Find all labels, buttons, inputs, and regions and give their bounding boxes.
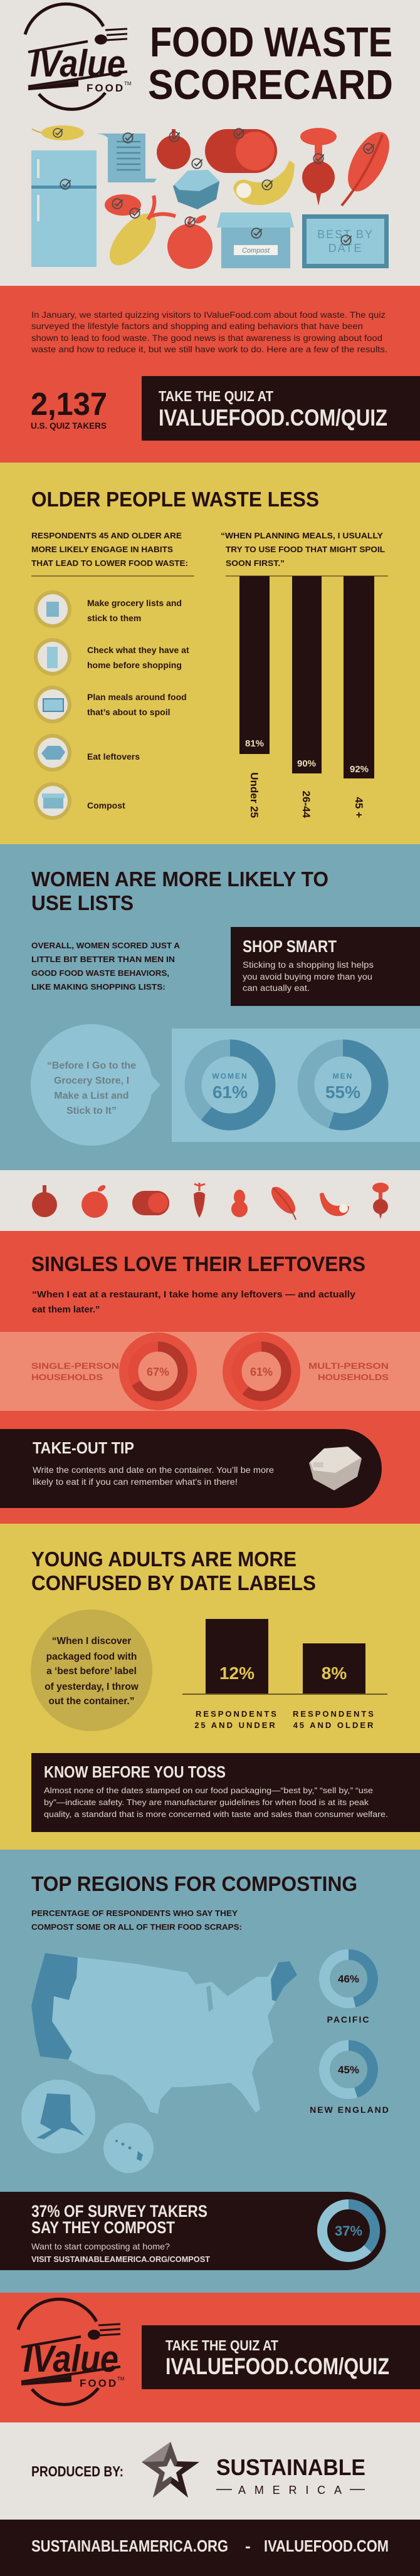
heading: OLDER PEOPLE WASTE LESS	[31, 488, 319, 511]
quote bubble: of yesterday, I throw	[45, 1682, 139, 1692]
heading	[31, 867, 328, 914]
label: multi-person households: HOUSEHOLDS	[318, 1372, 389, 1382]
donut chart: new england 45%: 45%	[338, 2064, 359, 2076]
bar chart: date label confusion	[182, 1619, 387, 1730]
panel: intro	[0, 286, 420, 463]
subheading	[31, 1908, 242, 1932]
callout: 37% say they compost: 37% OF SURVEY TAKERS	[31, 2202, 207, 2221]
callout: 37% say they compost: SAY THEY COMPOST	[31, 2218, 175, 2237]
bar chart: date label confusion: 45 AND OLDER	[293, 1720, 375, 1730]
intro paragraph	[31, 310, 387, 354]
logo text: sustainable america: AMERICA	[238, 2484, 342, 2496]
heading: SINGLES LOVE THEIR LEFTOVERS	[31, 1252, 365, 1275]
habit: plan meals: Plan meals around food	[87, 692, 187, 702]
habit: compost	[34, 782, 125, 820]
donut chart: 37%: 37%	[335, 2223, 362, 2239]
speech bubble: quote: Make a List and	[54, 1091, 129, 1101]
logo text: sustainable america	[216, 2454, 365, 2496]
icon: best by date	[302, 214, 389, 268]
callout: shop smart: Sticking to a shopping list helps	[243, 960, 374, 970]
callout: shop smart: SHOP SMART	[243, 937, 337, 956]
icon: takeout container	[309, 1447, 362, 1490]
quote bubble: “When I discover	[52, 1636, 131, 1647]
label: single-person households	[31, 1361, 119, 1382]
text block: habits intro: MORE LIKELY ENGAGE IN HABITS	[31, 545, 173, 554]
icon: best by date: BEST BY	[317, 228, 374, 241]
bar chart: use food that might spoil: 81%	[245, 738, 264, 749]
text block: women scored better	[31, 941, 181, 992]
donut chart: multi-person 61%	[223, 1333, 300, 1410]
icon: sausage	[132, 1191, 169, 1215]
donut chart: pacific 46%: PACIFIC	[327, 2014, 370, 2024]
text block: women scored better: LITTLE BIT BETTER THAN MEN IN	[31, 955, 175, 964]
icon: onion	[32, 1185, 57, 1217]
habit: plan meals: that’s about to spoil	[87, 707, 170, 717]
donut chart: men 55%	[306, 1048, 380, 1122]
icon: fridge	[31, 150, 97, 267]
bar chart: use food that might spoil	[239, 576, 374, 819]
icon: takeout box	[173, 159, 219, 209]
habit: grocery lists	[34, 590, 182, 628]
stat: quiz takers: 2,137	[31, 386, 107, 422]
donut chart: men 55%: MEN	[333, 1072, 353, 1081]
callout: take the quiz	[142, 376, 420, 441]
icon: squash	[231, 1190, 248, 1217]
quote bubble: packaged food with	[46, 1652, 137, 1662]
subheading: PERCENTAGE OF RESPONDENTS WHO SAY THEY	[31, 1908, 238, 1918]
logo: I Value Food	[18, 2299, 125, 2404]
habit: check home: Check what they have at	[87, 645, 189, 655]
footer: websites	[0, 2520, 420, 2576]
donut chart: 37%	[322, 2204, 375, 2257]
callout: know before you toss: KNOW BEFORE YOU TOSS	[44, 1762, 226, 1781]
title	[148, 19, 393, 108]
bar chart: use food that might spoil: 90%	[297, 758, 316, 769]
label: multi-person households	[308, 1361, 389, 1382]
callout: know before you toss	[31, 1753, 420, 1832]
text block: quote	[221, 531, 385, 568]
icon: grocery list	[94, 133, 157, 182]
icon: apple	[81, 1184, 108, 1218]
heading: CONFUSED BY DATE LABELS	[31, 1571, 316, 1594]
map inset: Hawaii	[103, 2123, 154, 2173]
text block: women scored better: GOOD FOOD WASTE BEHAVIORS,	[31, 968, 169, 978]
panel: women use lists	[0, 844, 420, 1170]
donut chart: women 61%: WOMEN	[212, 1072, 248, 1081]
callout: 37% say they compost	[0, 2192, 386, 2270]
callout: know before you toss: by”—indicate safety. They are manufacturer guidelines for when food is at its peak	[44, 1798, 369, 1807]
label: single-person households: SINGLE-PERSON	[31, 1361, 119, 1371]
speech bubble: quote	[31, 1024, 160, 1146]
callout: shop smart	[231, 927, 420, 1006]
logo text: sustainable america: SUSTAINABLE	[216, 2454, 365, 2480]
donut chart: single-person 67%	[119, 1333, 197, 1410]
callout: know before you toss: Almost none of the dates stamped on our food packaging—“best by,” “sell by,” “use	[44, 1786, 373, 1795]
bar chart: date label confusion: 8%	[322, 1663, 347, 1683]
habit: grocery lists: Make grocery lists and	[87, 598, 182, 608]
footer: websites: SUSTAINABLEAMERICA.ORG	[31, 2537, 228, 2555]
icon: compost bin: Compost	[242, 247, 270, 254]
heading: WOMEN ARE MORE LIKELY TO	[31, 867, 328, 891]
footer: websites: -	[245, 2537, 251, 2555]
text block: habits intro	[31, 531, 188, 568]
donut chart: women 61%	[193, 1048, 267, 1122]
icon: yellow leaf	[32, 125, 84, 140]
speech bubble: quote: Stick to It”	[66, 1106, 117, 1116]
label: single-person households: HOUSEHOLDS	[31, 1372, 103, 1382]
intro paragraph: surveyed the lifestyle factors and shopping and eating behaviors that have been	[31, 322, 363, 331]
text block: quote: SOON FIRST.”	[226, 558, 285, 568]
icon: beet	[372, 1183, 389, 1219]
icon: sustainable america star	[142, 2442, 199, 2498]
intro paragraph: In January, we started quizzing visitors to IValueFood.com about food waste. The quiz	[31, 310, 386, 320]
donut chart: new england 45%: NEW ENGLAND	[310, 2105, 390, 2115]
donut chart: women 61%: 61%	[213, 1082, 248, 1102]
callout: take-out tip: likely to eat it if you can remember what’s in there!	[33, 1477, 238, 1487]
intro paragraph: waste and how to reduce it, but we still have work to do. Here are a few of the results.	[31, 345, 387, 354]
icon: onion	[157, 129, 191, 169]
intro paragraph: shown to lead to food waste. The good news is that awareness is growing about food	[31, 333, 382, 343]
callout: take the quiz: TAKE THE QUIZ AT	[159, 388, 273, 404]
habit: leftovers	[34, 734, 140, 772]
icon: apple	[167, 214, 213, 269]
icon: red leaf	[340, 125, 397, 206]
panel: top regions for composting	[0, 1850, 420, 2293]
background: header	[0, 0, 420, 286]
bar chart: date label confusion: RESPONDENTS	[196, 1709, 278, 1719]
donut chart: multi-person 61%: 61%	[250, 1366, 273, 1378]
stat: quiz takers: U.S. QUIZ TAKERS	[31, 421, 107, 431]
callout: take the quiz: TAKE THE QUIZ AT	[165, 2337, 278, 2353]
title: SCORECARD	[148, 61, 393, 108]
donut chart: men 55%: 55%	[325, 1082, 360, 1102]
footer: websites: IVALUEFOOD.COM	[264, 2537, 389, 2555]
panel: young adults confused by date labels	[0, 1524, 420, 1850]
panel: older people waste less	[0, 463, 420, 844]
icon: leaf	[267, 1183, 300, 1220]
callout: take-out tip	[0, 1429, 382, 1508]
panel: footer quiz	[0, 2293, 420, 2422]
callout: take the quiz	[142, 2325, 420, 2389]
habit: grocery lists: stick to them	[87, 613, 141, 623]
icon: banana	[233, 160, 295, 205]
quote	[32, 1289, 356, 1315]
text block: habits intro: THAT LEAD TO LOWER FOOD WASTE:	[31, 558, 188, 568]
bar chart: use food that might spoil: Under 25	[248, 772, 260, 818]
donut chart: new england 45%	[310, 2046, 390, 2115]
list: habits with icons	[34, 590, 189, 820]
icon: sausage	[205, 128, 277, 173]
speech bubble: quote: Grocery Store, I	[54, 1076, 129, 1086]
bar chart: date label confusion: 25 AND UNDER	[194, 1720, 277, 1730]
icon: carrot	[101, 196, 176, 273]
callout: take-out tip: Write the contents and date on the container. You’ll be more	[33, 1465, 274, 1475]
heading: YOUNG ADULTS ARE MORE	[31, 1547, 297, 1571]
map: United States	[21, 1953, 297, 2173]
text block: women scored better: LIKE MAKING SHOPPING LISTS:	[31, 982, 165, 992]
heading: TOP REGIONS FOR COMPOSTING	[31, 1872, 357, 1895]
callout: 37% say they compost: Want to start composting at home?	[31, 2241, 170, 2251]
callout: shop smart: can actually eat.	[243, 983, 310, 993]
panel: singles love leftovers	[0, 1231, 420, 1524]
habit: plan meals	[34, 686, 187, 723]
donut chart: pacific 46%	[325, 1954, 372, 2024]
subheading: COMPOST SOME OR ALL OF THEIR FOOD SCRAPS:	[31, 1922, 242, 1932]
heading	[31, 1547, 316, 1594]
habit: leftovers: Eat leftovers	[87, 751, 140, 762]
map inset: Alaska	[21, 2080, 95, 2154]
speech bubble: quote: “Before I Go to the	[47, 1060, 136, 1071]
callout: shop smart: you avoid buying more than you	[243, 972, 372, 982]
donut chart: single-person 67%: 67%	[147, 1366, 169, 1378]
quote bubble: out the container.”	[49, 1696, 134, 1707]
icon: potato	[105, 194, 141, 216]
icon row: food silhouettes	[0, 1170, 420, 1231]
quote: eat them later.”	[32, 1304, 100, 1315]
icon: best by date: DATE	[328, 242, 362, 254]
logo: I Value Food	[25, 4, 132, 109]
quote bubble: a ‘best before’ label	[46, 1666, 137, 1677]
quote bubble	[31, 1610, 152, 1731]
callout: take-out tip: TAKE-OUT TIP	[33, 1438, 134, 1457]
habit: check home	[34, 638, 189, 676]
icon: carrot	[194, 1183, 205, 1218]
text block: quote: TRY TO USE FOOD THAT MIGHT SPOIL	[226, 545, 385, 554]
bar chart: use food that might spoil: 45 +	[353, 797, 365, 818]
habit: check home: home before shopping	[87, 660, 182, 670]
bar chart: date label confusion: 12%	[219, 1663, 255, 1683]
callout: know before you toss: quality, a standard that is more concerned with taste and sales than consumer welfare.	[44, 1809, 388, 1819]
bar chart: use food that might spoil: 26-44	[300, 791, 312, 819]
quote: “When I eat at a restaurant, I take home any leftovers — and actually	[32, 1289, 356, 1300]
panel: produced by	[0, 2422, 420, 2520]
bar chart: use food that might spoil: 92%	[350, 764, 369, 775]
heading: USE LISTS	[31, 891, 134, 914]
text block: habits intro: RESPONDENTS 45 AND OLDER ARE	[31, 531, 182, 540]
habit: compost: Compost	[87, 800, 125, 810]
text block: women scored better: OVERALL, WOMEN SCORED JUST A	[31, 941, 181, 950]
text block: quote: “WHEN PLANNING MEALS, I USUALLY	[221, 531, 383, 540]
icon: banana	[320, 1193, 349, 1216]
donut chart: pacific 46%: 46%	[338, 1973, 359, 1985]
illustration: food items	[31, 125, 397, 273]
icon: beet	[300, 128, 337, 206]
bar chart: date label confusion: RESPONDENTS	[293, 1709, 375, 1719]
label: multi-person households: MULTI-PERSON	[308, 1361, 389, 1371]
panel: produced by: PRODUCED BY:	[31, 2463, 123, 2479]
callout: 37% say they compost: VISIT SUSTAINABLEAMERICA.ORG/COMPOST	[31, 2254, 210, 2264]
icon: compost bin	[217, 212, 294, 268]
